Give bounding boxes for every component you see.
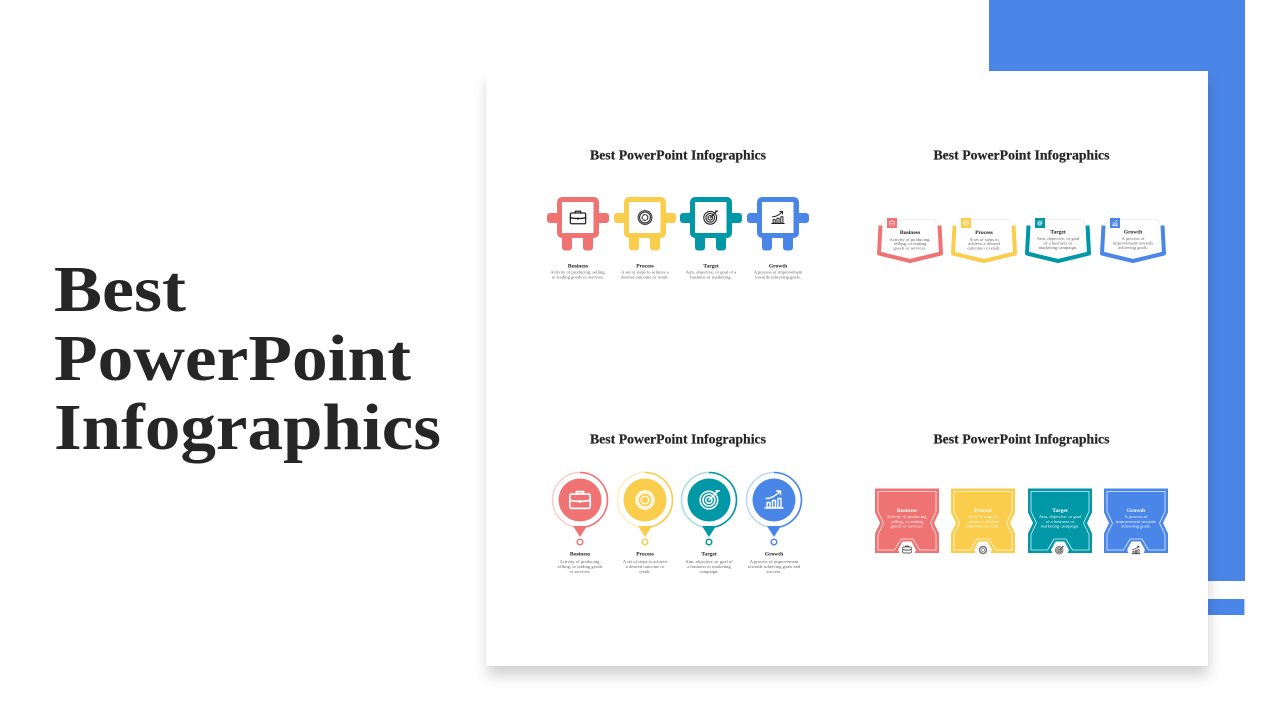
card: business: Business bbox=[900, 230, 920, 236]
card: business: selling, or trading bbox=[894, 241, 927, 247]
pin: target: Aim, objective, or goal of bbox=[685, 559, 733, 565]
heading: bottom left: Best PowerPoint Infographics bbox=[590, 432, 766, 446]
notched card: process: Process bbox=[974, 508, 992, 514]
notched card: business: selling, or trading bbox=[891, 519, 924, 525]
pin: growth: towards achieving goals and bbox=[748, 564, 801, 569]
card: business: goods or services. bbox=[893, 246, 927, 251]
heading: top left: Best PowerPoint Infographics bbox=[590, 148, 766, 162]
card: process: Process bbox=[975, 230, 993, 236]
pin: growth: A process of improvement bbox=[750, 559, 799, 564]
puzzle item: process bbox=[614, 197, 676, 280]
pin: target: campaign. bbox=[699, 569, 719, 574]
notched card: growth: Growth bbox=[1127, 508, 1145, 514]
pin: business: Business bbox=[570, 552, 590, 558]
pin: business: selling, or trading goods bbox=[558, 564, 603, 570]
puzzle item: target bbox=[680, 197, 742, 280]
notched card: growth: A process of bbox=[1125, 514, 1148, 519]
notched card: business bbox=[875, 488, 939, 559]
notched card: process: A set of steps to bbox=[968, 514, 998, 519]
card: growth: achieving goals. bbox=[1118, 245, 1148, 250]
card: process: achieve a desired bbox=[968, 241, 1001, 246]
card: target: Target bbox=[1050, 230, 1066, 236]
pin: target bbox=[682, 472, 736, 574]
puzzle item: business bbox=[547, 197, 609, 280]
puzzle item: business: Business bbox=[568, 264, 588, 270]
puzzle item: business: Activity of producing, selling, bbox=[550, 270, 606, 276]
card: growth: A process of bbox=[1122, 236, 1145, 241]
heading: top right: Best PowerPoint Infographics bbox=[934, 148, 1110, 162]
pin: target: Target bbox=[701, 552, 717, 558]
card: target: Aim, objective, or goal bbox=[1037, 236, 1080, 242]
main title: Infographics bbox=[54, 391, 441, 464]
pin: growth: success. bbox=[767, 569, 781, 574]
card: target: marketing campaign. bbox=[1039, 245, 1077, 250]
notched card: growth bbox=[1104, 488, 1168, 559]
panel: map pin infographic bbox=[552, 472, 802, 574]
panel: notched cards infographic bbox=[875, 488, 1168, 559]
puzzle item: target: business or marketing. bbox=[690, 274, 732, 280]
card: process: outcome or result. bbox=[967, 246, 1001, 251]
puzzle item: process: desired outcome or result. bbox=[621, 274, 669, 280]
panel: puzzle infographic bbox=[547, 197, 809, 280]
card: growth bbox=[1102, 218, 1164, 261]
notched card: growth: improvement towards bbox=[1116, 519, 1156, 524]
card: growth: Growth bbox=[1124, 230, 1142, 236]
puzzle item: growth: A process of improvement bbox=[754, 270, 803, 274]
card: target: of a business or bbox=[1044, 240, 1073, 246]
puzzle item: target: Aim, objective, or goal of a bbox=[686, 270, 736, 276]
pin: target: a business or marketing bbox=[687, 564, 731, 569]
blue backdrop strip bbox=[1100, 599, 1245, 615]
pin: process bbox=[618, 472, 672, 574]
card: target bbox=[1027, 218, 1089, 261]
notched card: process bbox=[951, 488, 1015, 559]
pin: process: result. bbox=[639, 569, 651, 574]
pin: growth bbox=[746, 472, 802, 574]
notched card: business: goods or services. bbox=[890, 524, 924, 528]
notched card: target: Aim, objective, or goal bbox=[1039, 514, 1082, 520]
puzzle item: growth bbox=[747, 197, 809, 280]
card: business: Activity of producing, bbox=[890, 237, 930, 243]
notched card: target: Target bbox=[1052, 508, 1068, 514]
notched card: process: outcome or result. bbox=[966, 524, 1000, 528]
main title bbox=[54, 253, 441, 464]
notched card: process: achieve a desired bbox=[967, 519, 1000, 524]
notched card: growth: achieving goals. bbox=[1121, 524, 1151, 528]
card: business bbox=[879, 218, 941, 261]
notched card: target bbox=[1028, 488, 1092, 559]
card: process: A set of steps to bbox=[969, 237, 999, 242]
puzzle item: process: Process bbox=[636, 264, 654, 270]
notched card: target: of a business or bbox=[1046, 519, 1075, 524]
main title: Best bbox=[54, 253, 186, 326]
puzzle item: process: A set of steps to achieve a bbox=[621, 270, 669, 274]
pin: process: A set of steps to achieve bbox=[623, 559, 667, 564]
card: process bbox=[953, 218, 1015, 261]
panel: pentagon cards infographic bbox=[879, 218, 1164, 261]
notched card: business: Activity of producing, bbox=[887, 514, 927, 520]
pin: business: or services. bbox=[570, 569, 590, 574]
puzzle item: growth: towards achieving goals. bbox=[755, 274, 801, 280]
heading: bottom right: Best PowerPoint Infographics bbox=[934, 432, 1110, 446]
notched card: target: marketing campaign. bbox=[1041, 524, 1079, 528]
puzzle item: business: or trading goods or services. bbox=[552, 274, 604, 280]
pin: business bbox=[552, 472, 608, 574]
pin: process: Process bbox=[636, 552, 654, 558]
pin: process: a desired outcome or bbox=[626, 564, 665, 569]
puzzle item: growth: Growth bbox=[769, 264, 787, 270]
blue backdrop block bbox=[989, 0, 1245, 581]
puzzle item: target: Target bbox=[703, 264, 719, 270]
main title: PowerPoint bbox=[54, 322, 411, 395]
white slide panel bbox=[486, 71, 1208, 666]
notched card: business: Business bbox=[897, 508, 917, 514]
pin: business: Activity of producing, bbox=[560, 559, 600, 565]
card: growth: improvement towards bbox=[1113, 240, 1153, 246]
pin: growth: Growth bbox=[765, 552, 783, 558]
